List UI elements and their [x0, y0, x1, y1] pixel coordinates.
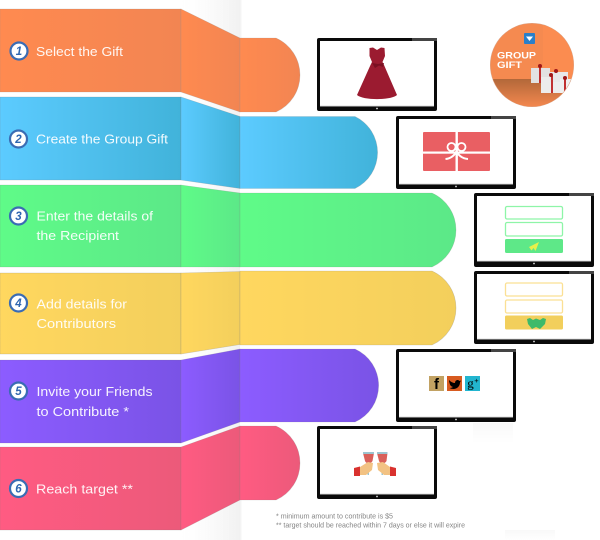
device 1: dress [317, 38, 437, 111]
step 2 label: 2 [14, 134, 22, 146]
form fields [505, 283, 563, 330]
device 4: contributors form [474, 271, 594, 344]
step 2 label [10, 130, 168, 148]
step 3 label: 3 [15, 211, 22, 223]
footnotes: * minimum amount to contribute is $5 [276, 512, 393, 520]
icon: red dress [357, 48, 397, 99]
step 5 label: to Contribute * [36, 404, 129, 419]
step 3 label [10, 208, 153, 243]
step 3 label: Enter the details of [36, 208, 153, 224]
step 6 label: 6 [15, 484, 22, 496]
form fields [505, 206, 563, 253]
step 4 band: yellow [0, 271, 456, 354]
step 4 label [10, 294, 128, 331]
step 5 band: purple [0, 349, 379, 443]
step 1 band: orange [0, 9, 300, 112]
icon: twitter [447, 376, 462, 391]
step 1 label [10, 42, 123, 60]
step 4 label: Contributors [36, 316, 117, 331]
footnotes: ** target should be reached within 7 days or else it will expire [276, 520, 465, 530]
step 6 label [10, 480, 133, 497]
icon: google plus: + [474, 376, 479, 385]
group gift badge [490, 23, 574, 107]
step 6 label: Reach target ** [36, 482, 133, 496]
device 3: recipient form [474, 193, 594, 267]
step 3 band: green [0, 185, 456, 267]
footnotes [276, 512, 465, 530]
step 2 label: Create the Group Gift [36, 132, 168, 146]
icon: google plus: g [467, 376, 474, 390]
background fold shadows [181, 0, 555, 540]
device 5: social icons [396, 349, 516, 422]
step 3 label: the Recipient [36, 228, 119, 243]
step 5 label [10, 382, 153, 419]
icon: facebook: f [434, 376, 440, 393]
step 1 label: 1 [16, 46, 22, 58]
device 6: toast [317, 426, 437, 499]
icon: gift card with bow [423, 132, 490, 171]
step 6 band: pink [0, 426, 300, 530]
device 2: gift card [396, 116, 516, 189]
group gift badge: GIFT [497, 60, 522, 71]
step 5 label: 5 [15, 386, 22, 398]
group gift badge: GROUP [497, 50, 537, 62]
step 5 label: Invite your Friends [36, 384, 153, 399]
icon: google plus [465, 376, 480, 391]
step 4 label: Add details for [36, 296, 128, 312]
step 2 band: blue [0, 97, 378, 188]
step 4 label: 4 [14, 298, 22, 310]
icon: clinking glasses [354, 452, 396, 476]
step 1 label: Select the Gift [36, 44, 123, 59]
